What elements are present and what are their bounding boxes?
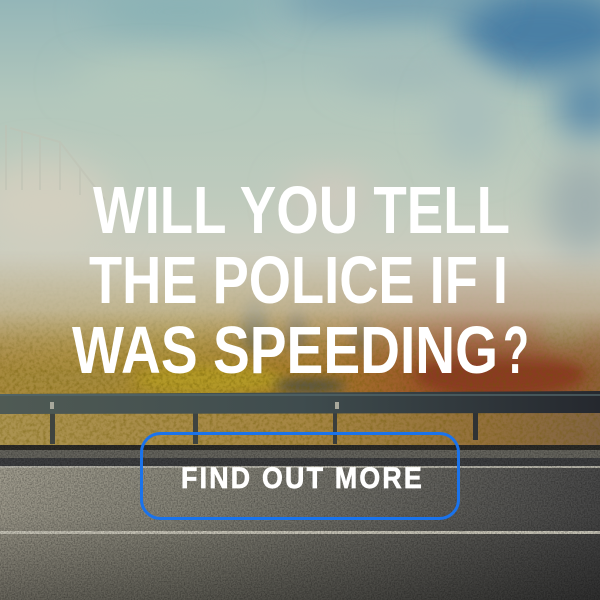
- faint bridge in the haze: [6, 125, 105, 200]
- headline: [72, 173, 529, 388]
- headline: WILL YOU TELL: [93, 173, 510, 248]
- sky background: [0, 0, 600, 400]
- call to action button: FIND OUT MORE: [181, 462, 424, 495]
- call to action button: [142, 434, 458, 518]
- guard rail: [0, 391, 600, 444]
- headline: THE POLICE IF I: [89, 243, 508, 318]
- autumn tree line: [0, 262, 600, 394]
- headline: ?: [503, 313, 529, 388]
- grass verge: [0, 412, 600, 448]
- road surface: [0, 445, 600, 600]
- headline: WAS SPEEDING: [72, 313, 498, 388]
